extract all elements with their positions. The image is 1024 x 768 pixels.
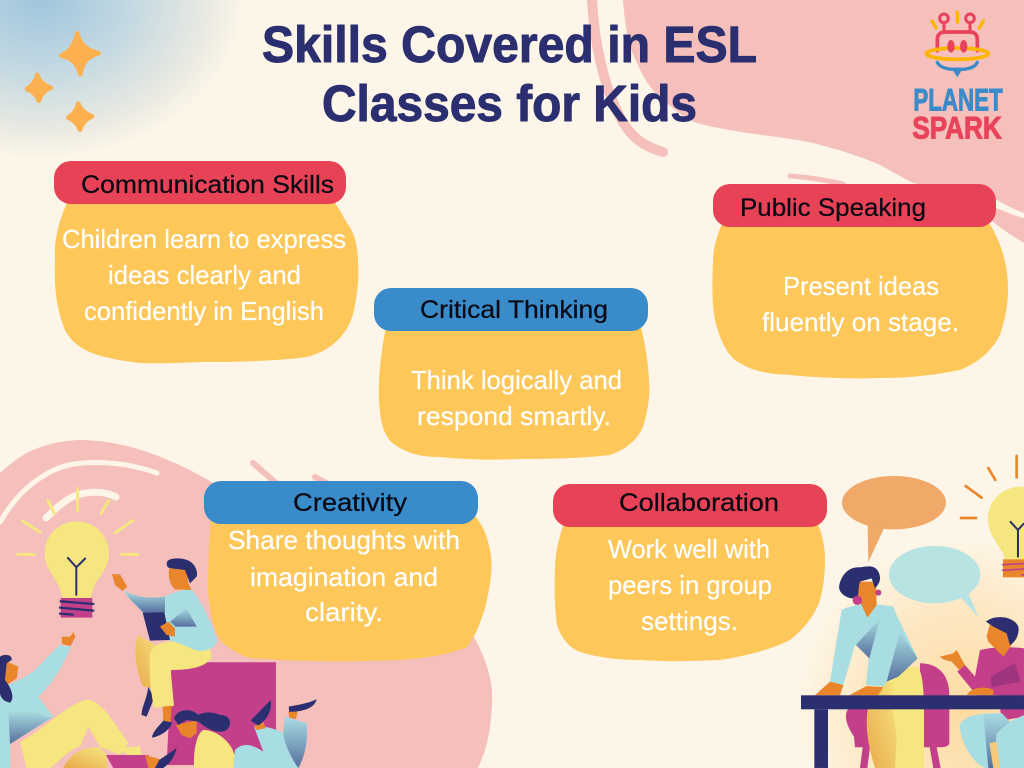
figure: reclining woman left [0,632,177,768]
card body [208,512,492,661]
body text [762,271,959,337]
icon: sparkle stars [27,33,99,130]
heading pill [553,484,827,527]
panel: Creativity [204,481,492,661]
table [801,695,1024,768]
panel: Public Speaking [712,184,1008,378]
heading: Creativity [293,489,408,517]
speech bubble: blue [889,546,980,618]
body text [411,365,622,431]
body text [228,525,460,627]
panel: Communication Skills [54,161,358,363]
card body [379,322,649,460]
body text: ideas clearly and [108,260,301,290]
heading: Critical Thinking [420,296,608,324]
body text: fluently on stage. [762,307,959,337]
card body [555,520,825,661]
heading pill [204,481,478,524]
card body [712,218,1008,378]
body text: settings. [641,606,738,636]
body text [62,224,346,326]
title [262,16,757,132]
background: pink blob bottom-left [0,440,492,768]
panel: Collaboration [553,484,827,661]
speech bubble: orange [842,476,946,562]
figure: seated man [940,617,1024,768]
chair [846,663,949,768]
figure: woman lying on front [174,699,317,768]
background: pink blob top-right [592,0,1024,243]
body text: clarity. [305,597,383,627]
icon: light bulb right [961,456,1024,577]
heading pill [54,161,346,204]
magenta box [167,662,276,765]
body text: Work well with [608,534,770,564]
title: Skills Covered in ESL [262,16,757,73]
body text: Children learn to express [62,224,346,254]
heading pill [713,184,996,227]
body text: confidently in English [84,296,324,326]
body text: imagination and [250,562,438,592]
background: peach glow bottom-right [790,530,1024,768]
body text [608,534,772,636]
illustration: team with light bulb (left) [0,488,317,768]
body text: peers in group [608,570,772,600]
heading: Collaboration [619,489,779,517]
logo: Planet Spark [912,12,1003,145]
body text: respond smartly. [417,401,611,431]
body text: Present ideas [783,271,939,301]
card body [55,196,358,363]
background: blue glow top-left [0,0,250,165]
body text: Share thoughts with [228,525,460,555]
figure: seated man [112,558,217,738]
body text: Think logically and [411,365,622,395]
title: Classes for Kids [322,75,697,132]
heading pill [374,288,648,331]
logo: Planet Spark: SPARK [912,109,1002,145]
icon: light bulb [18,488,138,618]
figure: standing woman [815,566,924,768]
heading: Communication Skills [81,171,334,199]
heading: Public Speaking [740,194,926,222]
panel: Critical Thinking [374,288,649,460]
illustration: people talking at table (right) [801,456,1024,768]
